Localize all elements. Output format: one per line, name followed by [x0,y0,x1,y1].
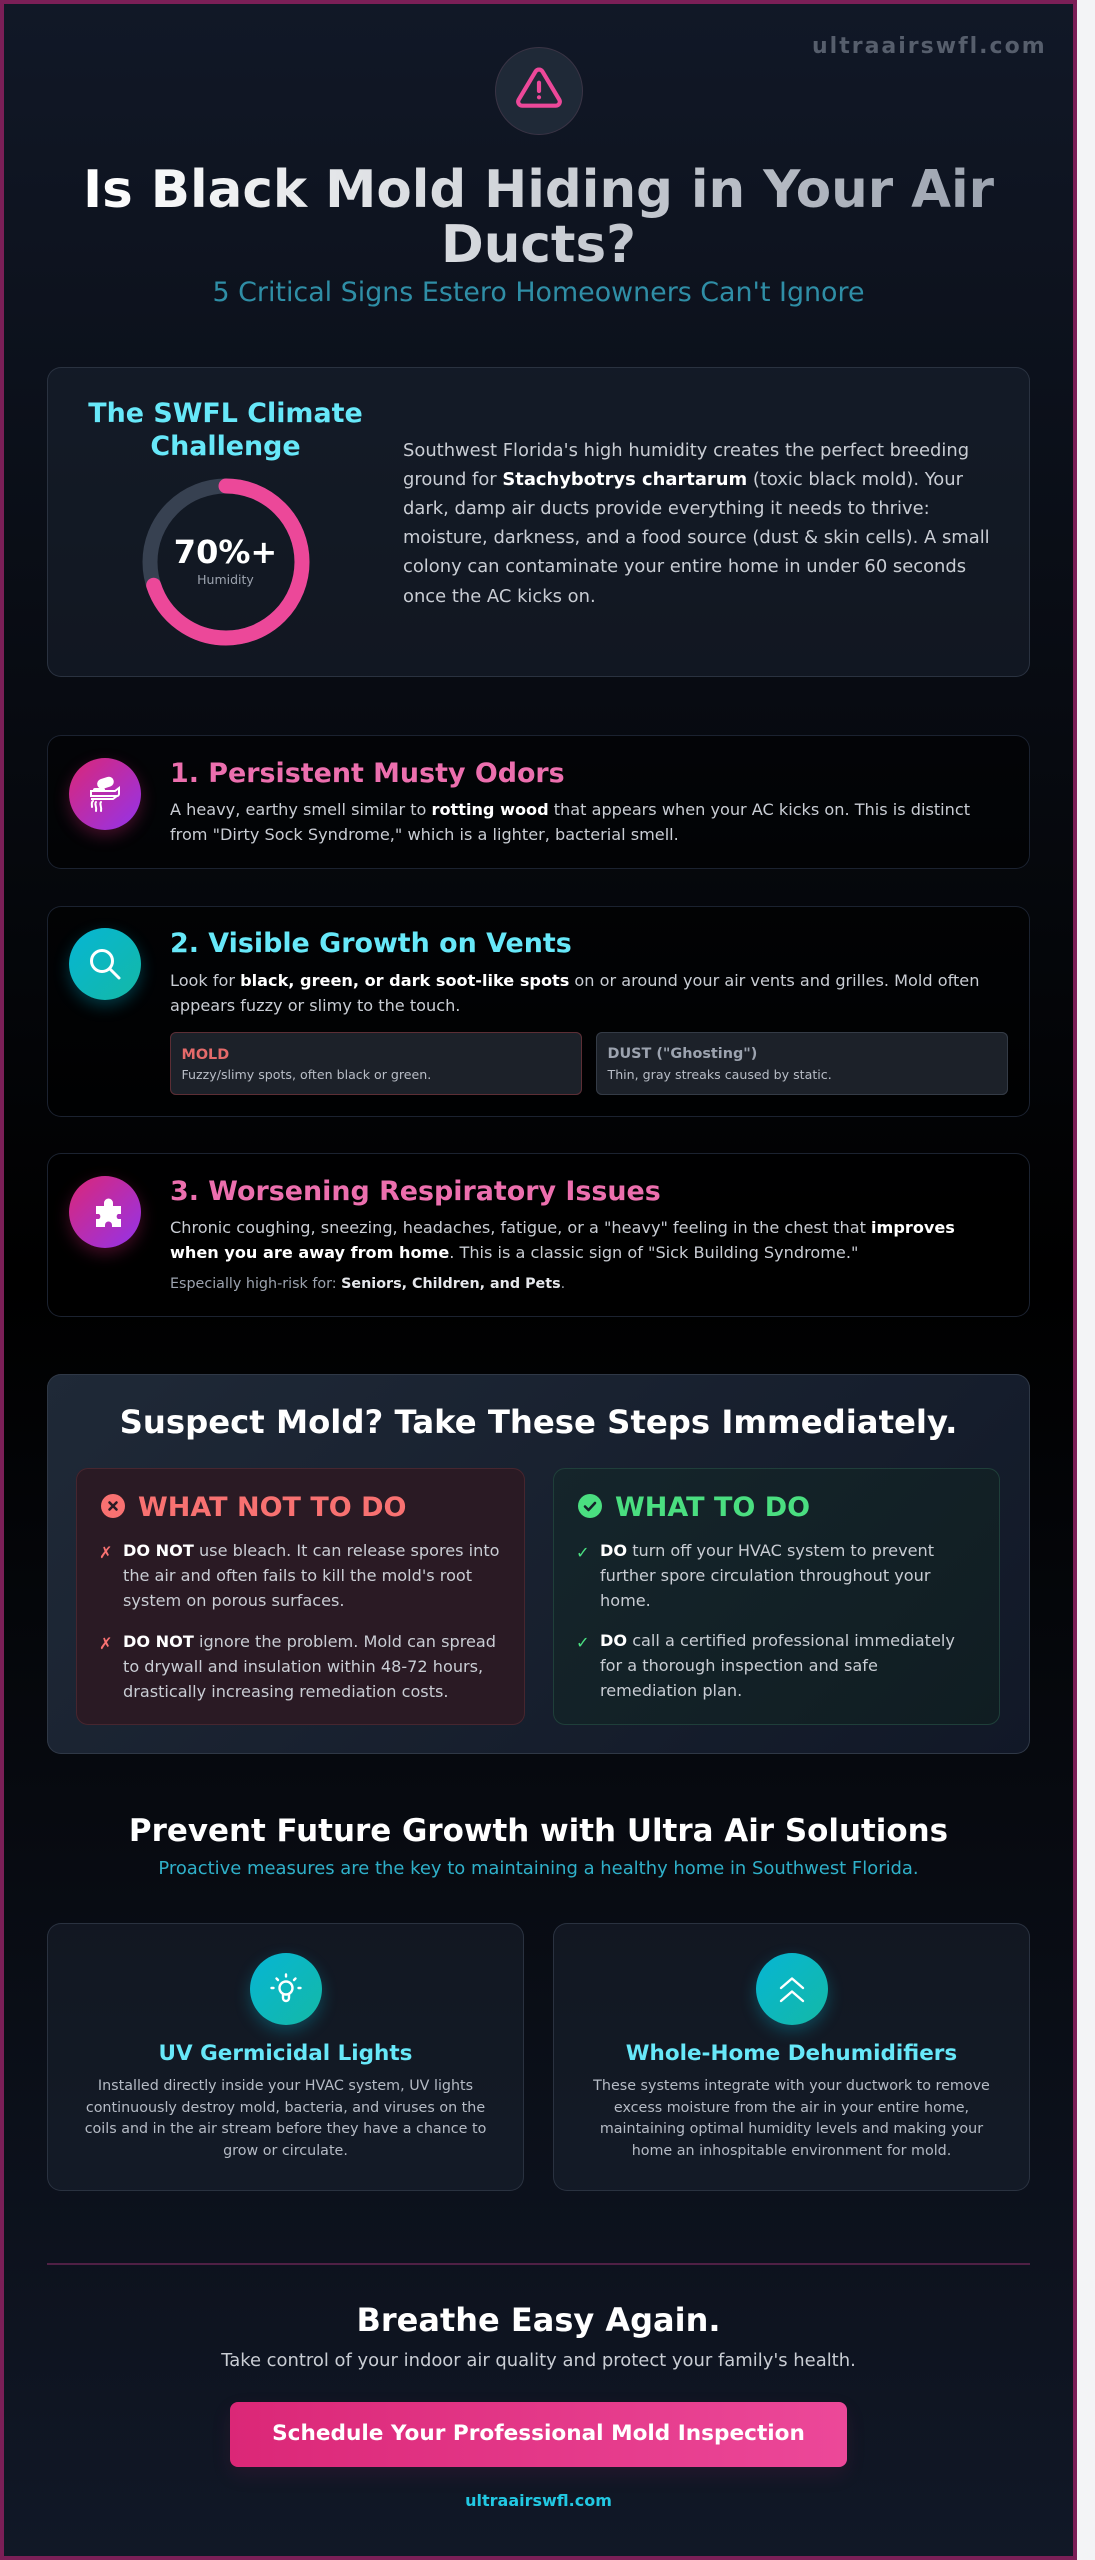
heading: UV lights: UV Germicidal Lights [159,2041,412,2066]
text: sign 1 [170,800,970,844]
climate description: dark, damp air ducts provide everything it needs to thrive: [403,498,930,519]
heading: dehumidifiers: Whole-Home Dehumidifiers [626,2041,957,2066]
footer text: Take control of your indoor air quality and protect your family's health. [221,2350,856,2371]
icon: double chevron [756,1953,828,2025]
heading: prevention: Prevent Future Growth with Ultra Air Solutions [129,1813,948,1849]
HVAC text [600,1541,934,1610]
text: dehumidifiers: These systems integrate with your ductwork to remove [593,2078,990,2094]
chart: humidity ring: 70%+ [174,533,277,571]
text: sign 2 [170,971,979,1015]
callout: mold [170,1032,582,1095]
title: Ducts? [441,215,636,275]
mold label: MOLD [182,1047,229,1063]
chart: humidity ring: Humidity [197,572,254,587]
mold description: Fuzzy/slimy spots, often black or green. [182,1067,431,1082]
ignore text: DO NOT ignore the problem. Mold can spread [123,1632,496,1651]
call to action button [230,2402,847,2467]
check mark: ✓ [576,1543,590,1562]
title: Is Black Mold Hiding in Your Air [83,160,994,220]
text: dehumidifiers: maintaining optimal humidity levels and making your [600,2121,983,2137]
call to action button: Schedule Your Professional Mold Inspection [272,2421,805,2446]
text: UV lights: continuously destroy mold, bacteria, and viruses on the [86,2100,485,2116]
panel: SWFL climate challenge [47,367,1030,677]
text: sign 3: Chronic coughing, sneezing, headaches, fatigue, or a "heavy" feeling in the chest that improves [170,1218,955,1237]
heading: climate challenge: The SWFL Climate [88,398,363,428]
text: UV lights: grow or circulate. [223,2142,348,2158]
icon: magnifier [69,928,141,1000]
text: dehumidifiers: home an inhospitable environment for mold. [632,2142,951,2158]
text: sign 3: when you are away from home. This is a classic sign of "Sick Building Syndrome." [170,1243,858,1262]
icon: odor [69,758,141,830]
bleach text: DO NOT use bleach. It can release spores into [123,1541,500,1560]
panel: what to do [553,1468,1000,1725]
text: sign 1: from "Dirty Sock Syndrome," which is a lighter, bacterial smell. [170,825,679,844]
cross mark: ✗ [99,1543,112,1562]
text: UV lights: Installed directly inside your HVAC system, UV lights [98,2078,473,2094]
panel: sign 1 musty odors [47,735,1030,869]
HVAC text: DO turn off your HVAC system to prevent [600,1541,934,1560]
text: dehumidifiers [593,2078,990,2158]
footer url: ultraairswfl.com [465,2491,612,2510]
heading: sign 2: 2. Visible Growth on Vents [170,928,572,959]
dust description: Thin, gray streaks caused by static. [608,1067,832,1082]
ignore text [123,1632,496,1701]
list item: ignore [99,1632,496,1701]
heading: what to do: WHAT TO DO [615,1492,810,1523]
professional text: remediation plan. [600,1681,742,1700]
panel: sign 2 visible growth [47,906,1030,1117]
text: high risk note: Especially high-risk for: Seniors, Children, and Pets. [170,1276,565,1292]
cross mark: ✗ [99,1634,112,1653]
climate description: ground for Stachybotrys chartarum (toxic black mold). Your [403,469,963,490]
icon: light bulb [250,1953,322,2025]
icon: x circle [101,1494,125,1518]
climate description: moisture, darkness, and a food source (dust & skin cells). A small [403,527,990,548]
prevention subtitle: Proactive measures are the key to maintaining a healthy home in Southwest Florida. [158,1858,919,1879]
ignore text: to drywall and insulation within 48-72 hours, [123,1657,483,1676]
bleach text: system on porous surfaces. [123,1591,345,1610]
footer heading: Breathe Easy Again. [356,2301,721,2339]
title [80,163,997,273]
text: sign 3 [170,1218,955,1262]
panel: sign 3 respiratory issues [47,1153,1030,1317]
climate description: Southwest Florida's high humidity creates the perfect breeding [403,440,969,460]
heading: what not to do: WHAT NOT TO DO [138,1492,406,1523]
heading: climate challenge [88,398,363,462]
heading: sign 3: 3. Worsening Respiratory Issues [170,1176,661,1207]
heading: steps: Suspect Mold? Take These Steps Immediately. [120,1403,957,1441]
heading: climate challenge: Challenge [150,430,301,462]
icon: puzzle piece [69,1176,141,1248]
professional text: DO call a certified professional immediately [600,1631,955,1650]
bleach text: the air and often fails to kill the mold's root [123,1566,472,1585]
icon: check circle [578,1494,602,1518]
website watermark: ultraairswfl.com [812,34,1047,59]
callout: dust [596,1032,1008,1095]
list item: HVAC off [576,1541,934,1610]
climate description [403,440,990,607]
dust label: DUST ("Ghosting") [608,1046,757,1062]
text: sign 2: appears fuzzy or slimy to the touch. [170,996,460,1015]
list item: call professional [576,1631,955,1700]
subtitle: 5 Critical Signs Estero Homeowners Can't Ignore [212,277,864,308]
panel: what not to do [76,1468,525,1725]
professional text: for a thorough inspection and safe [600,1656,878,1675]
climate description: colony can contaminate your entire home in under 60 seconds [403,556,966,577]
panel: immediate steps [47,1374,1030,1754]
climate description: once the AC kicks on. [403,586,596,607]
panel: UV germicidal lights [47,1923,524,2191]
HVAC text: further spore circulation throughout your [600,1566,930,1585]
check mark: ✓ [576,1633,590,1652]
heading: sign 1: 1. Persistent Musty Odors [170,758,565,789]
text: sign 2: Look for black, green, or dark soot-like spots on or around your air vents and grilles. Mold often [170,971,979,990]
bleach text [123,1541,500,1610]
HVAC text: home. [600,1591,651,1610]
text: UV lights [85,2078,486,2158]
professional text [600,1631,955,1700]
icon: warning triangle [494,47,582,135]
panel: whole-home dehumidifiers [553,1923,1030,2191]
text: sign 1: A heavy, earthy smell similar to rotting wood that appears when your AC kicks on. This is distinct [170,800,970,819]
list item: bleach [99,1541,500,1610]
text: dehumidifiers: excess moisture from the air in your entire home, [614,2100,969,2116]
ignore text: drastically increasing remediation costs. [123,1682,449,1701]
chart: humidity ring [142,478,310,646]
text: UV lights: coils and in the air stream before they have a chance to [85,2121,486,2137]
